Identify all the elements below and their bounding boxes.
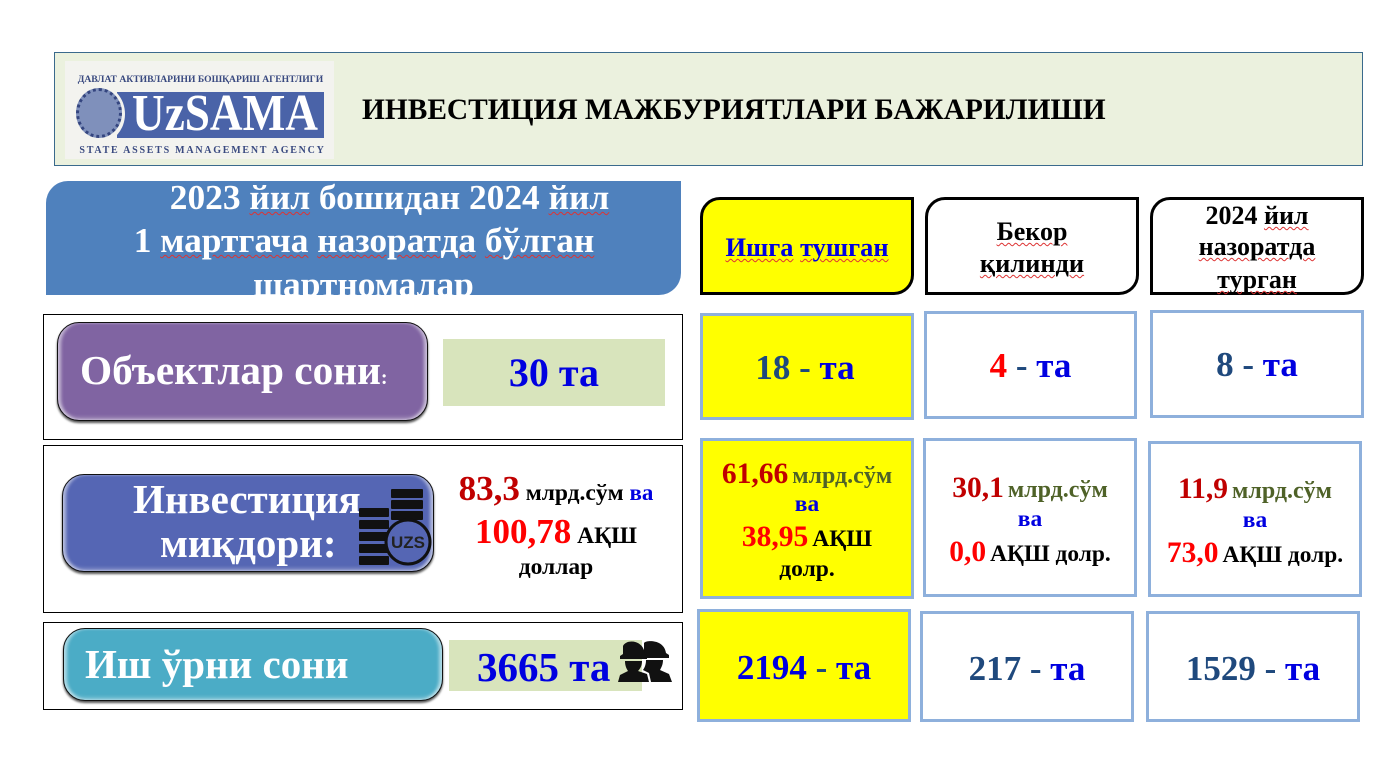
cell: cancelled jobs: 217 - та [969,649,1085,688]
label: objects count [57,322,428,421]
cell: cancelled investment: 30,1 млрд.сўм [952,472,1108,504]
panel: jobs row [43,622,683,710]
text: 3665 та [477,644,610,690]
panel: period heading: 1 мартгача назоратда бўлган [134,220,594,260]
column head: launched: Ишга тушган [725,232,889,262]
column head: launched [700,197,914,295]
value: objects total [443,339,665,406]
cell: under control objects: 8 - та [1216,345,1298,384]
value: objects total: 30 та [509,350,599,395]
title: ИНВЕСТИЦИЯ МАЖБУРИЯТЛАРИ БАЖАРИЛИШИ [362,94,1106,126]
panel: objects row [43,314,683,440]
label: investment amount: миқдори: [160,520,336,566]
cell: launched investment: ва [795,491,819,517]
column head: under control [1150,197,1364,295]
cell: under control investment: 73,0 АҚШ долр. [1167,537,1343,569]
value: investment total: 83,3 млрд.сўм ва [459,469,653,508]
cell: launched investment: 61,66 млрд.сўм [722,458,892,490]
logo: UzSAMA: STATE ASSETS MANAGEMENT AGENCY [79,145,326,156]
cell: cancelled investment [923,438,1137,597]
cell: under control jobs: 1529 - та [1186,649,1320,688]
column head: under control: турган [1217,265,1297,294]
icon: workers [618,641,672,682]
cell: launched objects [700,313,914,420]
panel: investment row [43,445,683,613]
column head: cancelled: Бекор [997,217,1067,246]
column head: cancelled [925,197,1139,295]
cell: launched jobs [697,609,911,722]
cell: under control investment: ва [1243,507,1267,533]
cell: under control jobs [1146,611,1360,722]
logo: UzSAMA: ДАВЛАТ АКТИВЛАРИНИ БОШҚАРИШ АГЕНТЛИГИ [78,74,323,85]
icon: UZS coins [359,489,432,566]
header banner [54,52,1363,166]
cell: launched jobs: 2194 - та [737,648,871,687]
cell: cancelled investment: 0,0 АҚШ долр. [949,536,1111,568]
value: investment total: доллар [519,554,593,580]
label: jobs count: Иш ўрни сони [85,641,348,687]
cell: launched objects: 18 - та [755,348,855,387]
cell: cancelled investment: ва [1018,506,1042,532]
value: jobs total [449,640,642,691]
column head: under control: 2024 йил [1205,201,1309,230]
label: jobs count [63,628,443,701]
logo: UzSAMA: UzSAMA [132,85,318,142]
column head: cancelled: қилинди [980,248,1084,278]
column head: under control: назоратда [1199,232,1315,261]
icon: UZS coins: UZS [391,533,425,552]
logo: UzSAMA [65,61,334,159]
cell: cancelled objects: 4 - та [990,346,1071,385]
cell: under control investment [1148,441,1362,597]
label: objects count: Объектлар сони: [80,347,388,393]
value: investment total [459,469,654,580]
cell: under control objects [1150,310,1364,418]
panel: period heading [46,181,681,295]
cell: launched investment: долр. [779,556,835,582]
cell: under control investment: 11,9 млрд.сўм [1178,473,1332,505]
cell: launched investment [700,438,914,599]
label: investment amount: Инвестиция [133,476,361,522]
cell: launched investment: 38,95 АҚШ [742,521,872,553]
label: investment amount [62,474,434,572]
cell: cancelled objects [924,311,1137,419]
cell: cancelled jobs [920,611,1134,722]
value: investment total: 100,78 АҚШ [475,512,637,551]
